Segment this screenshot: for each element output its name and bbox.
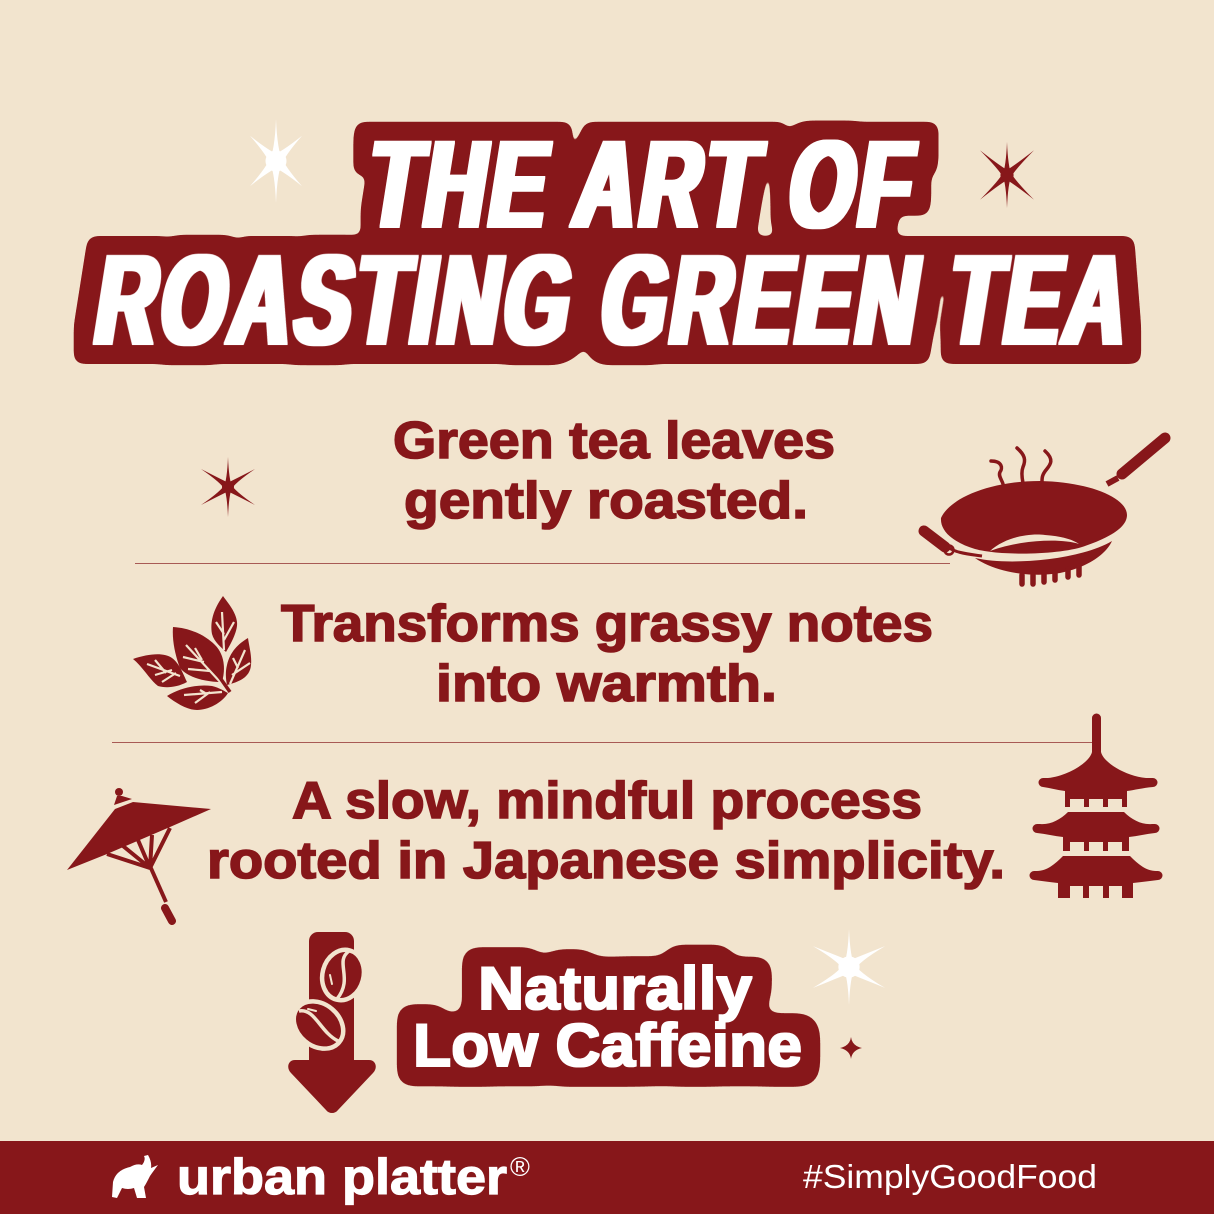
divider two (112, 742, 1097, 743)
title (87, 116, 1143, 372)
registered mark: ® (510, 1152, 530, 1182)
text: green tea leaves gently roasted: Green tea leaves (393, 412, 835, 470)
title: THE ART OF (360, 116, 928, 254)
icon: parasol (67, 788, 211, 921)
sparkle: small red (840, 1037, 862, 1059)
icon: elephant (112, 1155, 158, 1198)
callout: naturally low caffeine: Naturally (478, 955, 753, 1022)
icon: wok (924, 438, 1165, 584)
text: transforms grassy notes into warmth: into warmth. (436, 655, 777, 713)
sparkle: white bottom (813, 929, 885, 1005)
icon: pagoda (1030, 714, 1162, 898)
icon: tea leaves (133, 596, 251, 710)
divider one (135, 563, 950, 564)
hashtag: #SimplyGoodFood (803, 1158, 1097, 1195)
text: green tea leaves gently roasted: gently roasted. (404, 472, 808, 530)
sparkle: red left (201, 457, 255, 517)
text: slow mindful process (207, 772, 1005, 890)
brand name: urban platter (177, 1149, 507, 1205)
text: slow mindful process: A slow, mindful process (292, 772, 922, 830)
text: transforms grassy notes into warmth (281, 595, 933, 713)
icon: arrow with coffee beans (284, 932, 376, 1113)
text: transforms grassy notes into warmth: Transforms grassy notes (281, 595, 933, 653)
text: slow mindful process: rooted in Japanese simplicity. (207, 832, 1005, 890)
callout: naturally low caffeine (413, 955, 802, 1079)
text: green tea leaves gently roasted (393, 412, 835, 530)
footer band (0, 1141, 1214, 1214)
sparkle: white top left (250, 119, 302, 203)
sparkle: red top right (980, 142, 1034, 208)
callout: naturally low caffeine: Low Caffeine (413, 1012, 802, 1079)
